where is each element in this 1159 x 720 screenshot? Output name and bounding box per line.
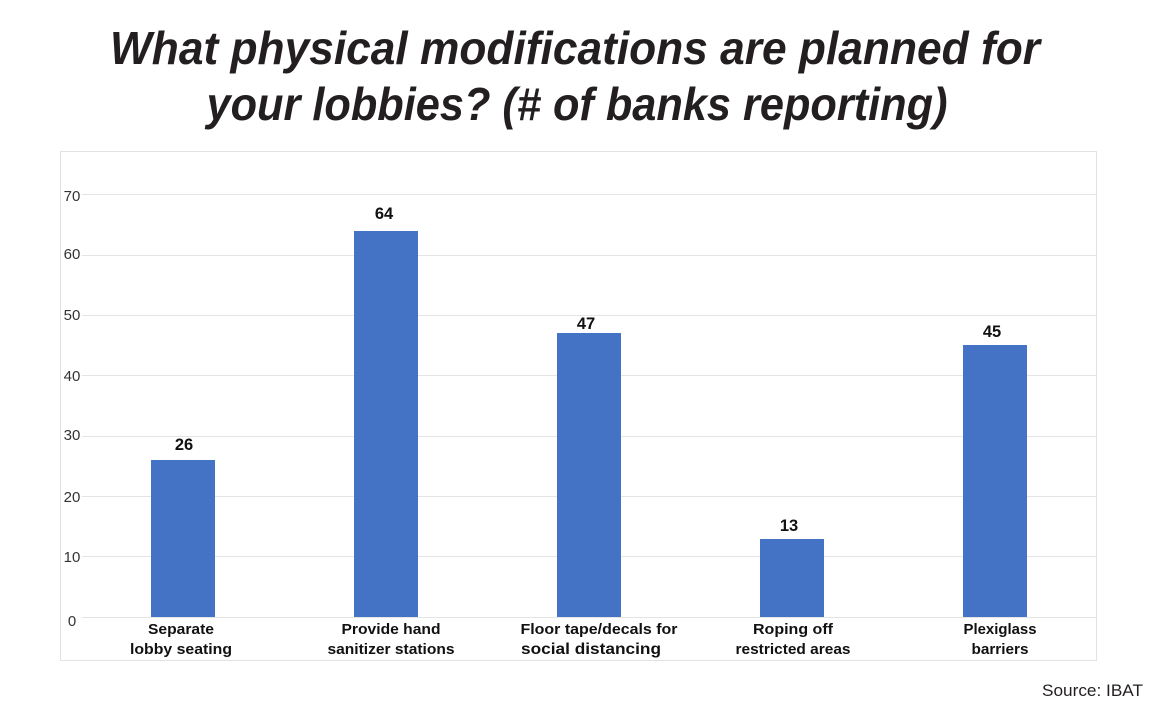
title	[110, 22, 1042, 130]
y axis labels	[64, 188, 80, 630]
category labels: Roping off	[753, 622, 833, 638]
bar: Plexiglass barriers	[963, 323, 1027, 617]
y axis labels: 0	[68, 613, 76, 630]
y axis labels: 10	[64, 549, 80, 566]
bar: Provide hand sanitizer stations: 64	[375, 205, 394, 223]
category labels: social distancing	[521, 641, 661, 658]
bar: Provide hand sanitizer stations	[354, 205, 418, 617]
y axis labels: 20	[64, 489, 80, 506]
y axis labels: 30	[64, 427, 80, 444]
category labels: lobby seating	[130, 642, 232, 658]
category labels: restricted areas	[736, 642, 850, 658]
category labels: Floor tape/decals for	[520, 622, 678, 638]
bar chart	[151, 205, 1027, 617]
bar: Separate lobby seating: 26	[175, 436, 193, 454]
y axis labels: 60	[64, 246, 80, 263]
y axis labels: 50	[64, 307, 80, 324]
bar: Separate lobby seating	[151, 436, 215, 617]
bar: Roping off restricted areas	[760, 517, 824, 617]
panel: chart frame	[60, 152, 1096, 660]
category labels: sanitizer stations	[328, 642, 454, 658]
title: your lobbies? (# of banks reporting)	[205, 78, 948, 130]
bar: Roping off restricted areas: 13	[780, 517, 798, 535]
bar: Plexiglass barriers: 45	[983, 323, 1001, 341]
category labels	[130, 622, 1036, 658]
bar: Floor tape/decals: 47	[577, 315, 595, 333]
bar: Floor tape/decals	[557, 315, 621, 617]
source note: Source: IBAT	[1042, 681, 1143, 700]
y axis labels: 70	[64, 188, 80, 205]
y axis labels: 40	[64, 368, 80, 385]
gridlines	[82, 194, 1096, 618]
title: What physical modifications are planned for	[110, 22, 1042, 74]
category labels: Provide hand	[342, 622, 440, 638]
category labels: Separate	[148, 622, 214, 638]
category labels: Plexiglass	[964, 622, 1036, 638]
category labels: barriers	[972, 642, 1028, 658]
